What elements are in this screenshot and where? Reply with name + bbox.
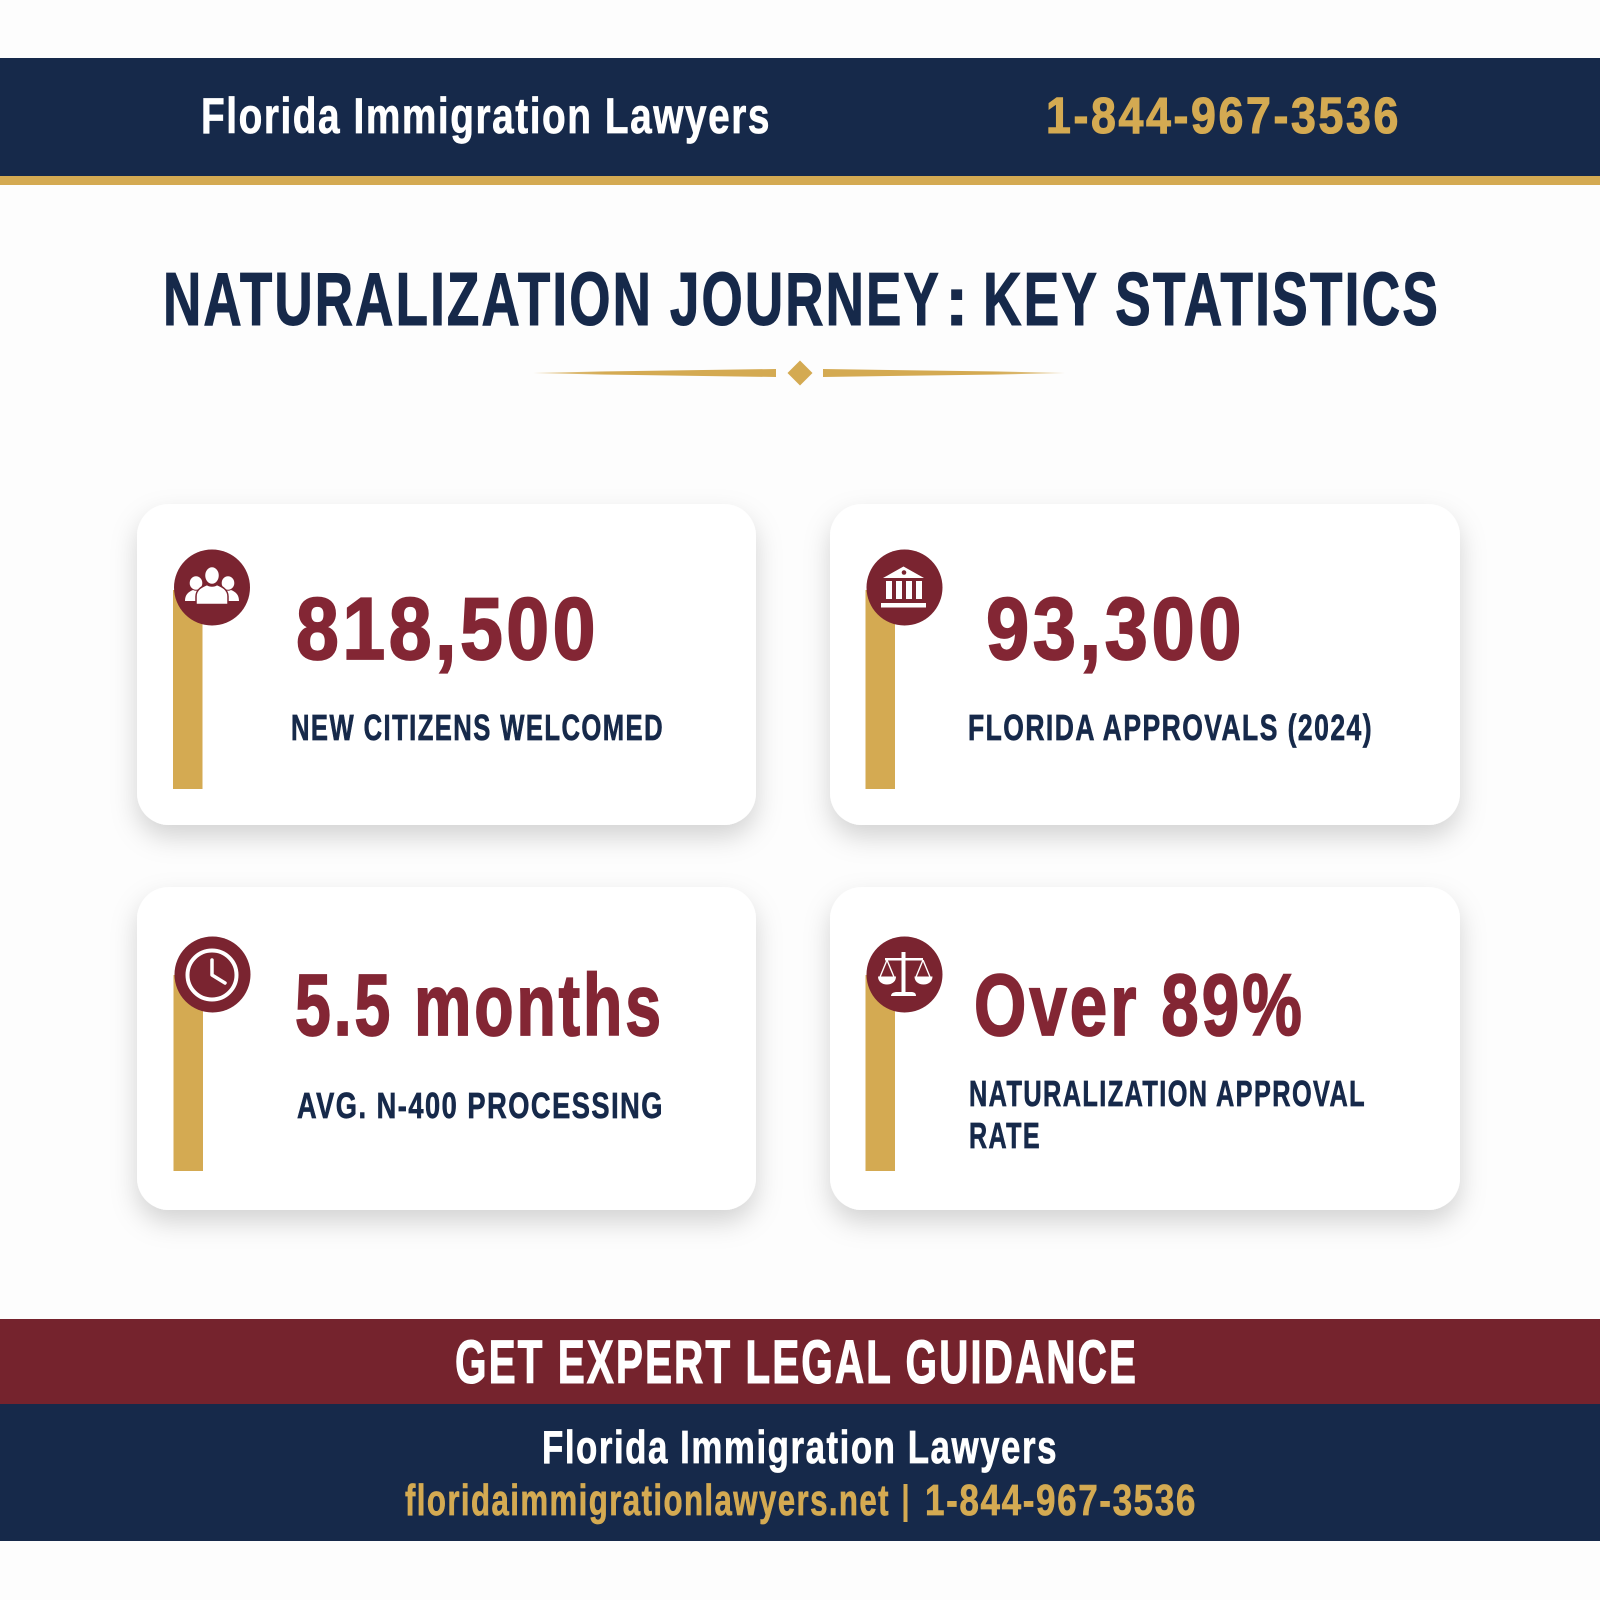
title divider with diamond — [533, 360, 1065, 386]
stat label: AVG. N-400 PROCESSING — [297, 1085, 664, 1126]
stat label: FLORIDA APPROVALS (2024) — [968, 707, 1373, 748]
stat label: NEW CITIZENS WELCOMED — [291, 707, 664, 748]
panel: new citizens — [137, 504, 756, 825]
stat value: 818,500 — [296, 579, 599, 678]
icon: people — [174, 550, 250, 626]
footer website and phone: floridaimmigrationlawyers.net — [405, 1476, 890, 1525]
stat label — [969, 1073, 1366, 1156]
stat value: 5.5 months — [295, 957, 664, 1054]
title: : — [945, 262, 971, 340]
gold bar — [173, 590, 202, 789]
gold bar — [866, 975, 895, 1171]
call to action banner: GET EXPERT LEGAL GUIDANCE — [455, 1328, 1138, 1396]
panel: florida approvals — [830, 504, 1460, 825]
call to action banner — [0, 1319, 1600, 1404]
footer firm name: Florida Immigration Lawyers — [542, 1421, 1058, 1473]
stat value: 93,300 — [986, 579, 1245, 678]
gold bar — [174, 975, 203, 1171]
header firm name: Florida Immigration Lawyers — [201, 88, 771, 144]
header bar — [0, 58, 1600, 185]
icon: scales of justice — [866, 936, 942, 1012]
stat value: Over 89% — [974, 957, 1305, 1054]
header phone number: 1-844-967-3536 — [1046, 87, 1401, 144]
icon: courthouse — [866, 550, 942, 626]
panel: approval rate — [830, 887, 1460, 1210]
title: NATURALIZATION JOURNEY — [163, 257, 941, 341]
footer website and phone: 1-844-967-3536 — [925, 1476, 1197, 1525]
footer bar — [0, 1404, 1600, 1541]
stat label: NATURALIZATION APPROVAL — [969, 1073, 1366, 1114]
gold bar — [866, 590, 895, 789]
panel: processing time — [137, 887, 756, 1210]
stat label: RATE — [969, 1115, 1041, 1156]
icon: clock — [174, 936, 250, 1012]
